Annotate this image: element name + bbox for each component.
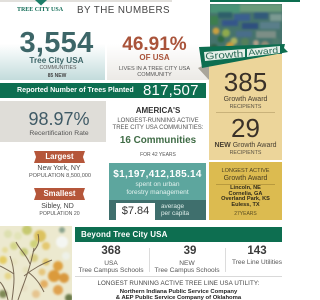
value: 143 — [247, 245, 267, 257]
divider — [224, 248, 227, 272]
divider — [148, 248, 151, 272]
heading: AMERICA'S — [136, 106, 180, 115]
new number: 29 — [231, 113, 260, 143]
ribbon: largest — [34, 151, 85, 163]
label: USA — [104, 260, 118, 266]
flag: growth award: Award — [248, 45, 279, 57]
heading: LONGEST ACTIVE — [221, 168, 270, 174]
photo: autumn tree — [0, 226, 72, 300]
recipients number: 385 — [224, 67, 267, 97]
award box — [247, 46, 280, 57]
highlight: 16 Communities — [120, 135, 196, 146]
cities: Lincoln, NE — [230, 185, 261, 191]
flag shadow — [198, 63, 209, 80]
banner: beyond tree city — [75, 227, 282, 242]
per capita value — [116, 203, 155, 220]
heading: LONGEST RUNNING ACTIVE TREE LINE USA UTILITY: — [97, 280, 260, 287]
ribbon label: Largest — [45, 152, 74, 161]
photo: aerial neighbourhood — [210, 4, 282, 54]
panel: longest active growth award — [209, 162, 282, 220]
description — [119, 66, 190, 78]
amount description: forestry management — [126, 189, 189, 196]
flag text: Growth — [205, 49, 244, 62]
panel: percent of USA — [107, 32, 208, 80]
rate: 98.97% — [28, 109, 90, 129]
new sublabel: RECIPIENTS — [230, 150, 261, 156]
flag: growth award — [198, 44, 288, 80]
per capita label: average — [161, 203, 184, 210]
description: LONGEST-RUNNING ACTIVE — [117, 118, 199, 124]
stat: campus schools — [78, 245, 144, 274]
panel: recertification — [0, 101, 106, 142]
text block: longest utility — [97, 280, 260, 300]
utility names — [116, 289, 242, 300]
value: 368 — [101, 245, 121, 257]
of USA: OF USA — [139, 53, 170, 62]
ribbon label: Smallest — [43, 189, 76, 198]
cities — [221, 185, 270, 208]
percent: 46.91% — [122, 34, 187, 54]
text block: longest running — [112, 106, 203, 158]
label: Tree City USA — [29, 56, 84, 65]
amount description: spent on urban — [136, 181, 180, 188]
largest city: New York, NY — [37, 165, 81, 172]
new count: 85 NEW — [48, 72, 66, 78]
top green strip — [210, 0, 300, 2]
banner label: Beyond Tree City USA — [81, 230, 167, 238]
panel: urban forestry spend — [109, 163, 206, 220]
header strip — [0, 0, 172, 2]
per capita band — [109, 200, 206, 220]
recipients sublabel: RECIPIENTS — [230, 104, 261, 110]
banner: trees planted — [0, 83, 206, 98]
largest population: POPULATION 8,500,000 — [29, 172, 91, 178]
years: 27YEARS — [234, 210, 257, 216]
recipients label: Growth Award — [224, 96, 267, 102]
growth box — [204, 49, 245, 61]
logo — [17, 0, 64, 13]
years: FOR 42 YEARS — [140, 152, 176, 158]
label: Tree Line Utilities — [232, 259, 282, 266]
cities: Overland Park, KS — [221, 196, 270, 202]
cities: Euless, TX — [231, 202, 260, 208]
description: LIVES IN A TREE CITY USA — [119, 66, 190, 72]
divider — [216, 111, 275, 114]
award name: Growth Award — [224, 175, 267, 182]
utility names: Northern Indiana Public Service Company — [120, 289, 237, 295]
smallest city: Sibley, ND — [41, 203, 74, 210]
divider — [216, 183, 275, 186]
stat: utilities — [232, 245, 282, 266]
title: BY THE NUMBERS — [77, 4, 170, 16]
banner label: Reported Number of Trees Planted — [17, 86, 134, 94]
big number: 3,554 — [19, 27, 94, 59]
ribbon: smallest — [34, 188, 85, 200]
value: 39 — [184, 245, 196, 257]
panel: growth award tan — [209, 54, 282, 160]
cities: Cornelia, GA — [229, 191, 262, 197]
amount: $1,197,412,185.14 — [113, 169, 202, 180]
stat: new campus schools — [154, 245, 220, 274]
logo wordmark: TREE CITY USA — [17, 7, 63, 13]
banner number: 817,507 — [143, 82, 199, 99]
panel: communities — [0, 32, 105, 80]
smallest population: POPULATION 20 — [39, 210, 80, 216]
per capita label: per capita — [161, 210, 189, 217]
per capita value: $7.84 — [122, 205, 149, 217]
per capita label — [161, 203, 190, 217]
label: NEW — [179, 260, 195, 266]
description — [112, 118, 203, 131]
new label: NEW Growth Award — [214, 142, 277, 148]
label — [78, 260, 144, 274]
divider rule — [75, 275, 282, 278]
label: Tree Campus Schools — [154, 266, 220, 274]
label: Tree Campus Schools — [78, 266, 144, 274]
logo icon — [35, 0, 47, 6]
description: TREE CITY USA COMMUNITIES: — [113, 125, 203, 131]
rate label: Recertification Rate — [29, 130, 89, 137]
label — [154, 260, 220, 274]
flag body — [199, 44, 288, 68]
sub label: COMMUNITIES — [40, 65, 76, 71]
description: COMMUNITY — [137, 72, 172, 78]
amount description — [126, 181, 189, 196]
